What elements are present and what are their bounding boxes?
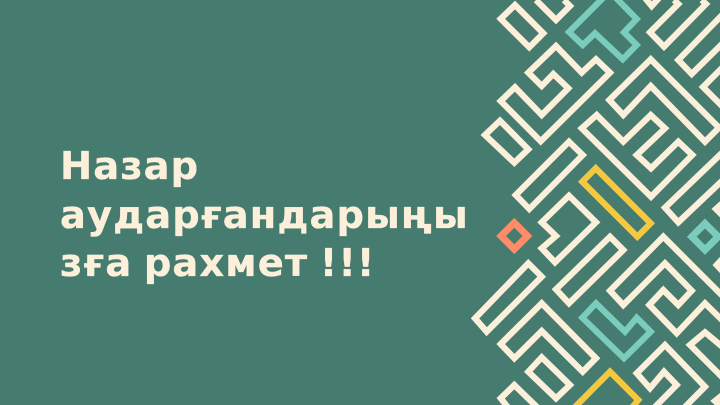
title: Назар — [60, 144, 199, 189]
icon: orange diamond — [501, 223, 528, 249]
yellow maze shapes — [572, 168, 651, 405]
title: зға рахмет !!! — [60, 241, 376, 286]
cream maze lines — [475, 0, 720, 405]
title — [60, 144, 469, 286]
icon: teal diamond — [692, 224, 718, 250]
teal maze shapes — [569, 0, 651, 358]
title: аударғандарыңы — [60, 192, 469, 238]
